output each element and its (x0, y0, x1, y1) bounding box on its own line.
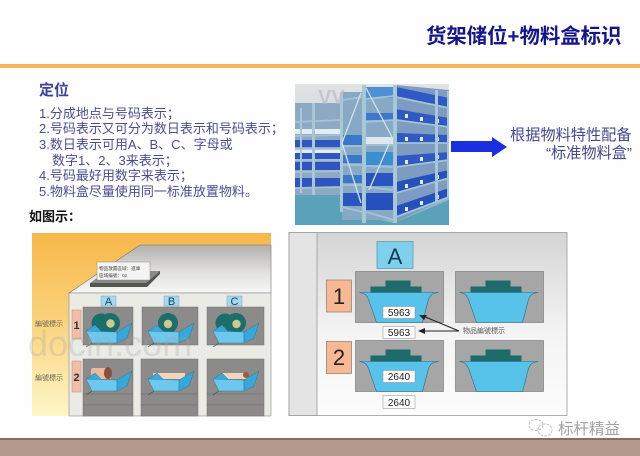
side frame bins (342, 92, 394, 220)
text block: positioning rules: 1.分成地点与号码表示； (39, 106, 180, 122)
frame posts (300, 85, 449, 223)
pointer arrows (418, 315, 459, 334)
row labels (35, 319, 63, 382)
code labels: 2640 (388, 398, 411, 409)
row tag 2: 2 (333, 345, 345, 370)
text block: positioning rules: 4.号码最好用数字来表示； (39, 168, 193, 184)
panel: shelf illustration (28, 233, 271, 416)
watermark letters: VV (318, 87, 345, 109)
wechat mark: 标杆精益 (558, 420, 620, 438)
title: 货架储位+物料盒标识 (426, 24, 621, 48)
callout: standard material box (510, 127, 632, 162)
bin tags (405, 114, 439, 211)
caption: as shown: 如图示： (29, 209, 81, 224)
text block: positioning rules: 数字1、2、3来表示； (52, 153, 178, 169)
row tag 1 (326, 280, 352, 312)
code labels (383, 306, 415, 409)
row tag 1: 1 (333, 284, 345, 309)
header rule (0, 64, 640, 68)
column tags (101, 296, 242, 308)
bays (83, 307, 264, 416)
text block: positioning rules: 3.数日表示可用A、B、C、字母或 (39, 137, 233, 152)
sign (90, 262, 160, 287)
text block: positioning rules: 5.物料盒尽量使用同一标准放置物料。 (39, 184, 258, 199)
column tag A (377, 242, 413, 269)
code labels: 5963 (388, 328, 411, 339)
row tags: 1 (73, 320, 80, 332)
row tags: 2 (73, 372, 80, 384)
photo: warehouse shelves (295, 84, 449, 225)
front face background (396, 85, 449, 222)
wechat mark (529, 420, 620, 438)
column tags: C (231, 296, 239, 308)
bins (356, 272, 444, 322)
cargo row two (91, 367, 249, 379)
row labels: 編號標示 (35, 373, 63, 382)
callout: standard material box: “标准物料盒” (546, 145, 632, 162)
far shelf bins (295, 140, 341, 187)
row tags (72, 310, 81, 392)
tape rolls (92, 313, 246, 333)
code labels: 2640 (388, 372, 411, 383)
panel: bin labelling diagram (289, 232, 567, 416)
code labels: 5963 (388, 308, 411, 319)
arrow (451, 137, 507, 157)
watermark: docin.com (28, 323, 192, 364)
column tags: B (168, 296, 175, 308)
heading: positioning: 定位 (39, 81, 69, 99)
front face bins (396, 87, 449, 217)
column tag A: A (388, 244, 403, 269)
pointer label: 物品編號標示 (463, 326, 505, 335)
sign: 物品放置區域：進庫 (99, 265, 141, 272)
shelf top (69, 245, 271, 293)
column tags: A (105, 296, 113, 308)
row tag 2 (326, 342, 352, 374)
sign: 區域編號：02 (99, 272, 128, 279)
text block: positioning rules: 2.号码表示又可分为数日表示和号码表示； (39, 121, 284, 137)
bins (86, 323, 132, 347)
row labels: 編號標示 (35, 319, 63, 328)
shelf front (69, 293, 271, 416)
footer band (0, 438, 640, 456)
shelf beams (295, 88, 449, 220)
callout: standard material box: 根据物料特性配备 (510, 127, 632, 144)
text block: positioning rules (39, 106, 284, 199)
